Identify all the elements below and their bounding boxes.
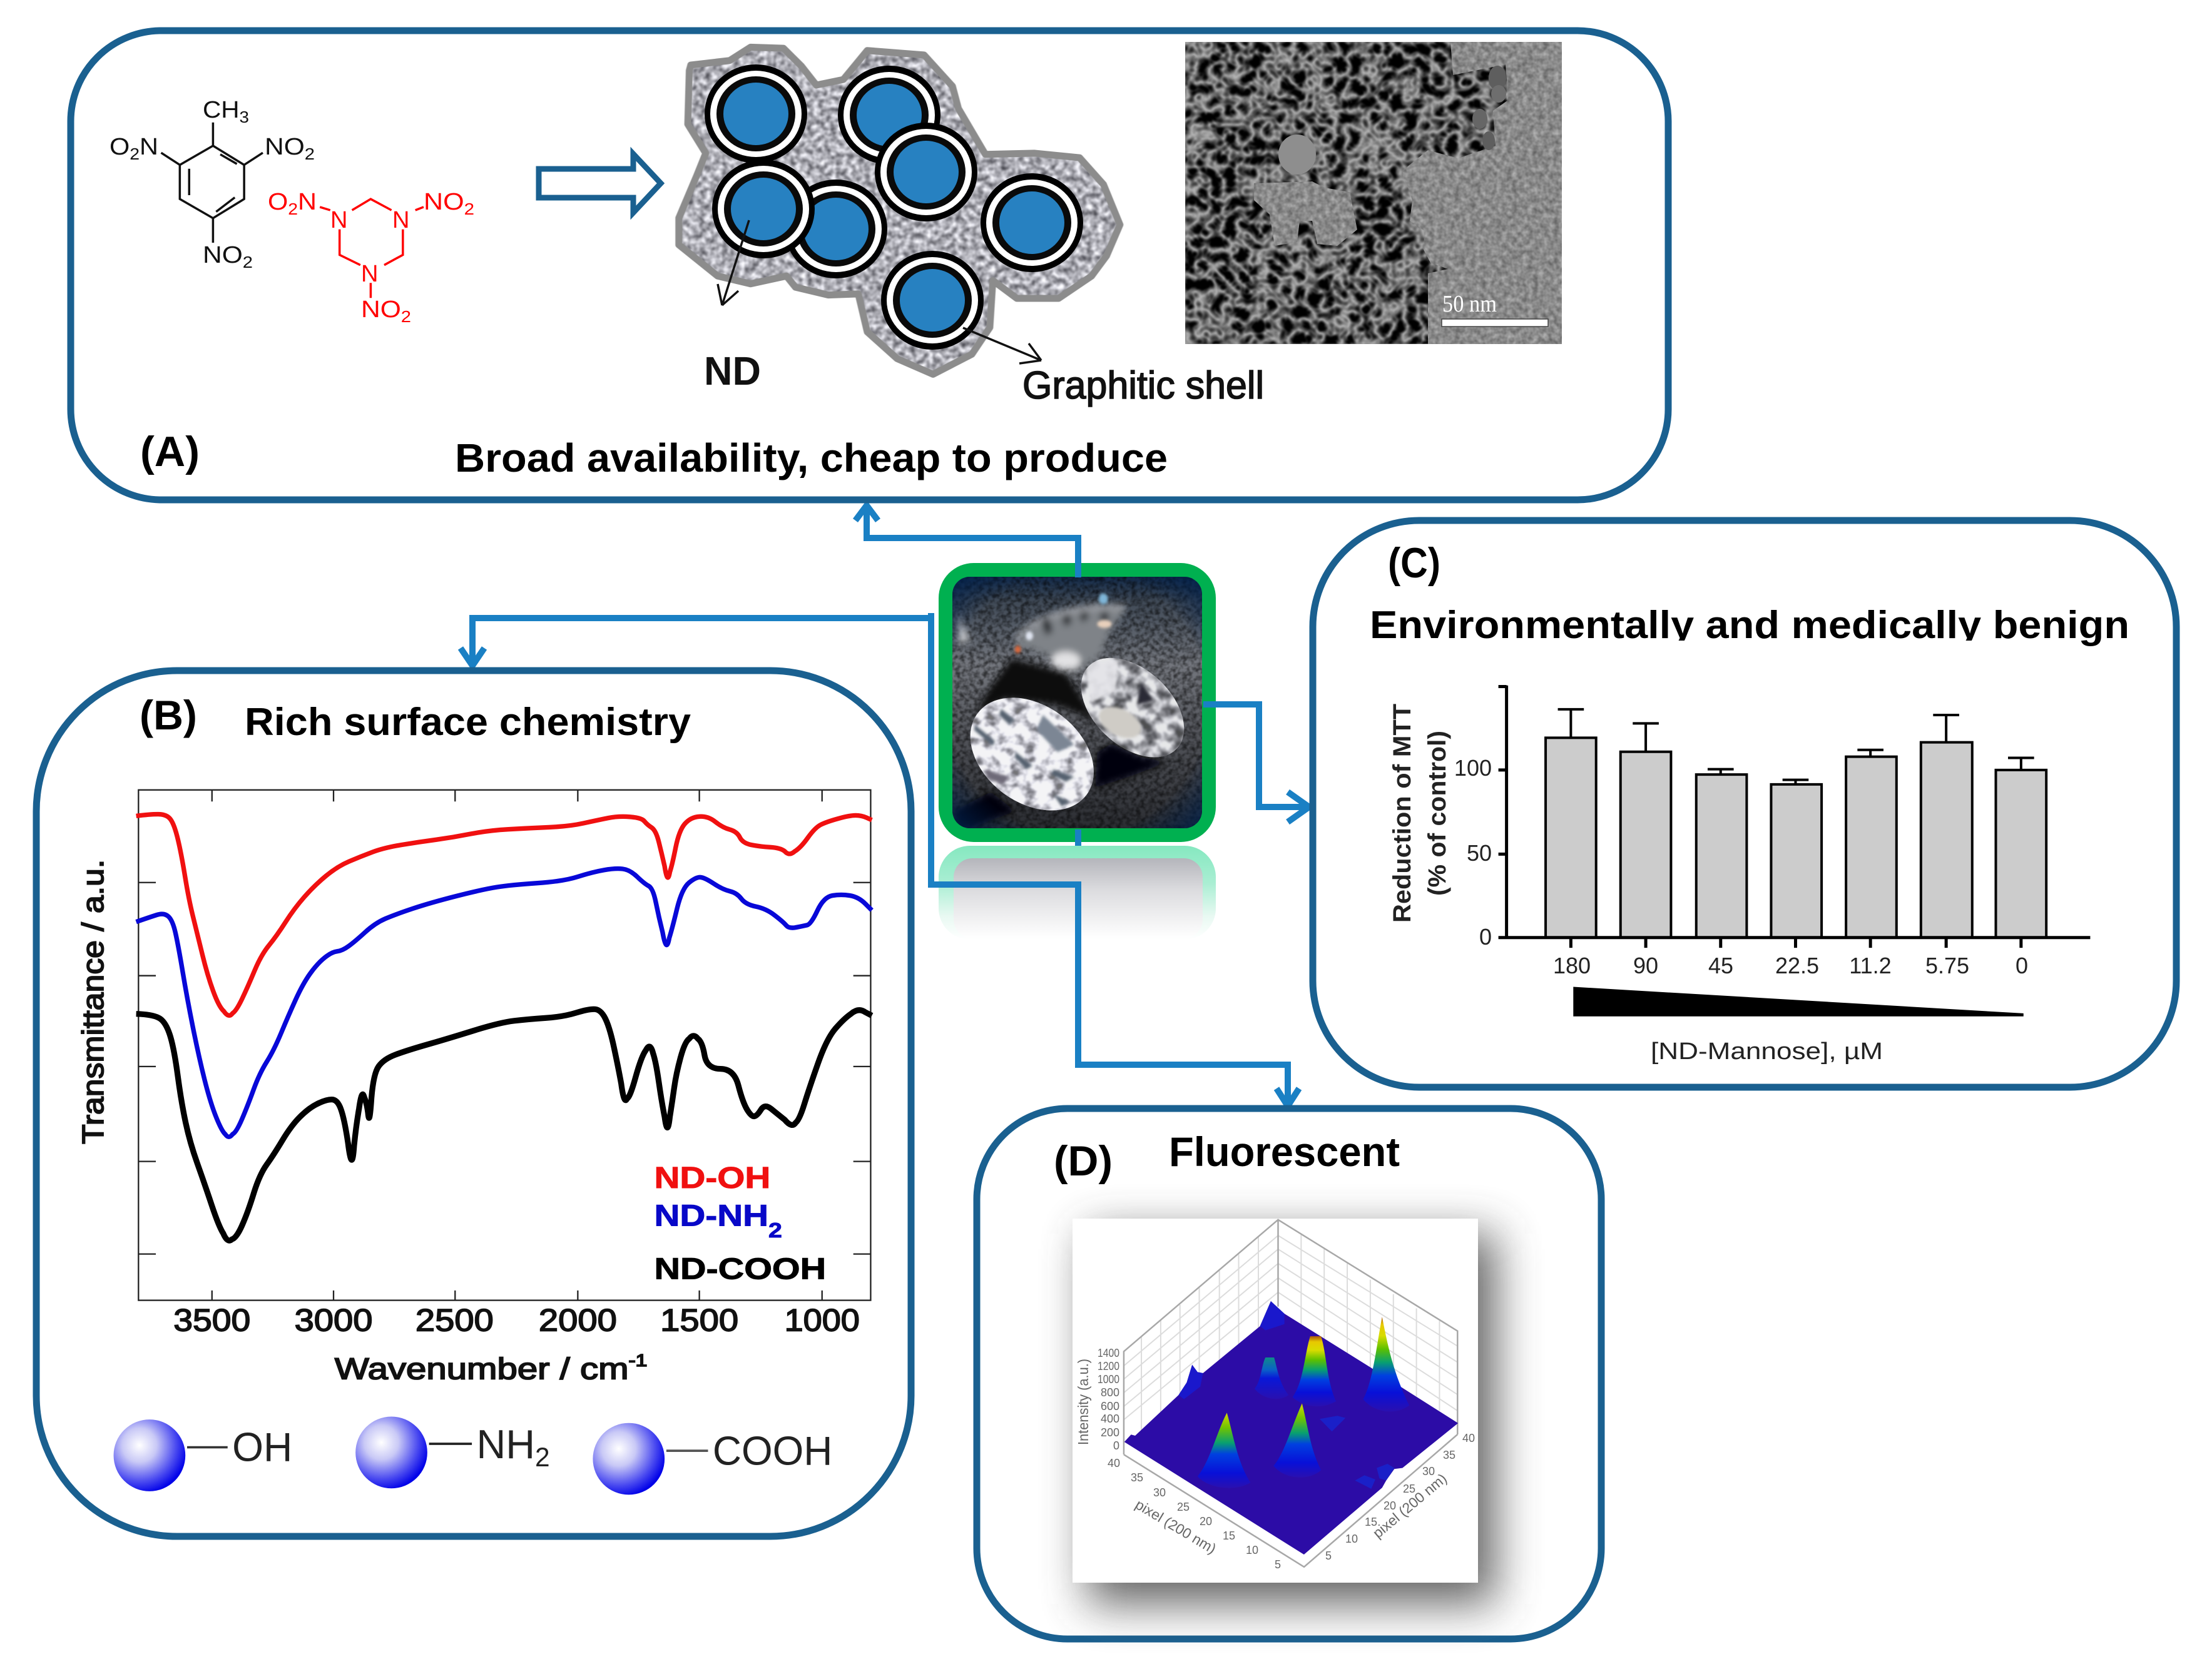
centre image reflection [931,613,1216,1065]
legend: ND-NH2: 2 [768,1219,782,1242]
intensity axis ticks: 800 [1101,1386,1119,1399]
diamond ring in the background [959,604,1126,673]
y axis title [1389,704,1451,923]
RDX molecule structure in red: N [330,207,347,233]
panel A frame [71,31,1668,500]
heading: Rich surface chemistry: Rich surface chemistry [245,701,691,744]
3D fluorescence intensity plot [1073,1219,1496,1604]
intensity axis ticks [1098,1347,1119,1452]
RDX molecule structure in red: 2 [401,307,411,326]
functional group: NH2 [355,1417,550,1488]
legend: ND-NH2: ND-NH [654,1199,751,1232]
intensity axis title: Intensity (a.u.) [1075,1359,1091,1445]
panel C: environmentally and medically benign [1313,520,2176,1087]
RDX molecule structure in red: 2 [288,200,298,218]
TNT molecule structure: O [110,134,128,160]
right pixel axis ticks [1325,1432,1475,1562]
panel label (D): (D) [1054,1137,1113,1185]
RDX molecule structure in red: O [268,189,287,215]
connector stubs over frame [1078,563,1216,842]
red curve: ND-OH [136,814,872,1015]
image background [1073,1219,1478,1583]
x axis tick labels: 1000 [785,1303,860,1338]
aggregate matrix [670,38,1133,394]
x axis concentration values: 180 [1553,953,1591,978]
panel C frame [1313,520,2176,1087]
functional group: NH2: 2 [535,1443,550,1473]
TNT molecule structure: NO [203,242,238,268]
right pixel axis ticks: 30 [1422,1465,1435,1478]
FTIR spectra chart [76,790,872,1386]
error bars [1558,709,2034,784]
fluorescence peak 4 [1198,1413,1250,1488]
heading: Broad availability, cheap to produce: Broad availability, cheap to produce [455,435,1168,480]
back wall grid [1124,1235,1457,1436]
TEM micrograph with scale bar [1185,42,1562,344]
legend: ND-OH: ND-OH [654,1161,770,1195]
right pixel axis ticks: 5 [1325,1550,1332,1562]
black curve: ND-COOH [136,1009,872,1240]
y axis title: Reduction of MTT [1389,704,1416,923]
ring sparkles [1015,594,1112,653]
x axis concentration values [1553,953,2028,978]
label: Graphitic shell: Graphitic shell [1022,364,1264,407]
right pixel axis ticks: 35 [1443,1449,1455,1461]
x axis concentration values: 5.75 [1925,953,1969,978]
floor surface [1124,1301,1458,1555]
left pixel axis title: pixel (200 nm) [1133,1496,1219,1557]
y axis values: 50 [1467,840,1492,866]
right pixel axis title: pixel (200 nm) [1370,1470,1450,1541]
RDX molecule structure in red: 2 [464,200,474,218]
scale bar [1442,319,1548,327]
functional group: COOH: COOH [713,1428,832,1473]
small diamond [1070,651,1193,764]
RDX molecule structure in red: N [298,189,317,215]
right pixel axis ticks: 15 [1365,1516,1377,1528]
textured dark cloth background [951,576,1203,830]
axis box lines [1124,1220,1457,1567]
left pixel axis ticks: 5 [1275,1558,1281,1571]
functional group: COOH [593,1423,832,1494]
label: ND: ND [704,348,761,393]
RDX molecule structure in red: NO [361,297,397,323]
x axis tick labels: 2000 [539,1303,617,1338]
x axis tick labels: 3500 [173,1303,250,1338]
intensity axis ticks: 1200 [1098,1360,1119,1372]
y axis values: 100 [1454,755,1492,781]
x axis tick labels: 2500 [415,1303,494,1338]
y axis title: (% of control) [1424,731,1451,896]
fluorescence peak 1 [1363,1317,1409,1412]
back corner bumps [1178,1301,1285,1399]
panel B frame [36,671,911,1536]
TNT molecule structure: CH [203,97,237,123]
left pixel axis ticks [1108,1457,1281,1571]
x axis concentration values: 45 [1708,953,1733,978]
x axis concentration values: 22.5 [1775,953,1819,978]
RDX molecule structure in red: N [392,207,409,233]
x axis tick labels: 1500 [660,1303,738,1338]
right pixel axis ticks: 20 [1384,1499,1396,1512]
diamond photo [951,576,1203,830]
intensity axis ticks: 200 [1101,1426,1119,1439]
green frame [939,563,1216,842]
right pixel axis ticks: 40 [1462,1432,1475,1444]
concentration wedge [1573,987,2024,1017]
left pixel axis ticks: 10 [1246,1544,1258,1556]
y axis title: Transmittance / a.u. [76,860,110,1144]
panel D: fluorescent [977,1108,1601,1639]
centre image: diamonds in green frame [939,563,1216,842]
intensity axis ticks: 1000 [1098,1373,1119,1386]
left pixel axis ticks: 35 [1131,1471,1143,1484]
y axis values [1454,755,1492,950]
intensity axis ticks: 600 [1101,1400,1119,1413]
legend: ND-COOH: ND-COOH [654,1252,826,1286]
panel B: rich surface chemistry [36,671,911,1536]
dark-blue edge vignette [951,576,1203,830]
x axis tick labels: 3000 [295,1303,372,1338]
x axis title: -1 [629,1351,647,1370]
functional group: NH2: NH [476,1421,535,1467]
arrow to ND core [718,220,749,305]
intensity axis ticks: 0 [1113,1439,1119,1452]
fluorescence peak 5 [1273,1403,1321,1478]
blue curve: ND-NH2 [136,869,872,1137]
hollow arrow: synthesis direction [539,154,661,213]
TNT molecule structure: N [140,134,158,160]
x axis concentration values: 90 [1633,953,1658,978]
bars [1546,738,2046,938]
nanodiamond aggregate with graphitic shells [670,38,1264,407]
arrow to graphitic shell [963,328,1041,363]
TNT molecule structure: 3 [240,108,249,126]
left pixel axis ticks: 30 [1153,1486,1166,1499]
functional group: OH [114,1419,292,1491]
right pixel axis ticks: 25 [1403,1483,1415,1495]
image drop shadow [1088,1234,1496,1604]
TNT molecule structure: 2 [130,145,140,163]
axes and ticks [1499,686,2090,948]
RDX molecule structure in red [268,189,474,326]
y axis values: 0 [1479,924,1492,950]
connectors: blue arrows from the centre image to the panels [461,505,1309,1106]
TNT molecule structure [110,97,315,271]
bar chart: reduction of MTT [1389,686,2090,1065]
x axis title: [ND-Mannose], µM [1651,1038,1883,1065]
TNT molecule structure: NO [265,134,300,160]
RDX molecule structure in red: N [361,261,378,287]
intensity axis ticks: 400 [1101,1413,1119,1425]
functional group: OH: OH [232,1424,292,1470]
TNT molecule structure: 2 [243,253,253,271]
x axis concentration values: 0 [2016,953,2028,978]
RDX molecule structure in red: NO [424,189,459,215]
x axis concentration values: 11.2 [1849,953,1892,978]
chart frame and ticks [138,790,870,1301]
TNT molecule structure: 2 [305,145,315,163]
left pixel axis ticks: 15 [1223,1530,1235,1542]
panel label (B): (B) [140,692,197,738]
x axis title: Wavenumber / cm [335,1352,578,1386]
small bumps [1320,1416,1394,1489]
panel D frame [977,1108,1601,1639]
right pixel axis ticks: 10 [1345,1533,1358,1545]
core-shell nanodiamond particles [705,64,1083,350]
panel label (A): (A) [140,428,200,475]
fluorescence peak 3 [1255,1357,1288,1399]
large diamond [964,690,1099,816]
left pixel axis ticks: 20 [1200,1515,1212,1528]
fluorescence peak 2 [1293,1336,1336,1406]
intensity axis ticks: 1400 [1098,1347,1119,1359]
left pixel axis ticks: 40 [1108,1457,1120,1469]
scale label: 50 nm [1442,291,1497,317]
left pixel axis ticks: 25 [1177,1501,1190,1513]
black shadows behind diamonds [974,658,1099,725]
x axis tick labels [173,1303,860,1338]
heading: Environmentally and medically benign: Environmentally and medically benign [1370,604,2129,647]
heading: Fluorescent: Fluorescent [1169,1129,1400,1175]
panel A: broad availability [71,31,1668,500]
panel label (C): (C) [1388,539,1440,587]
